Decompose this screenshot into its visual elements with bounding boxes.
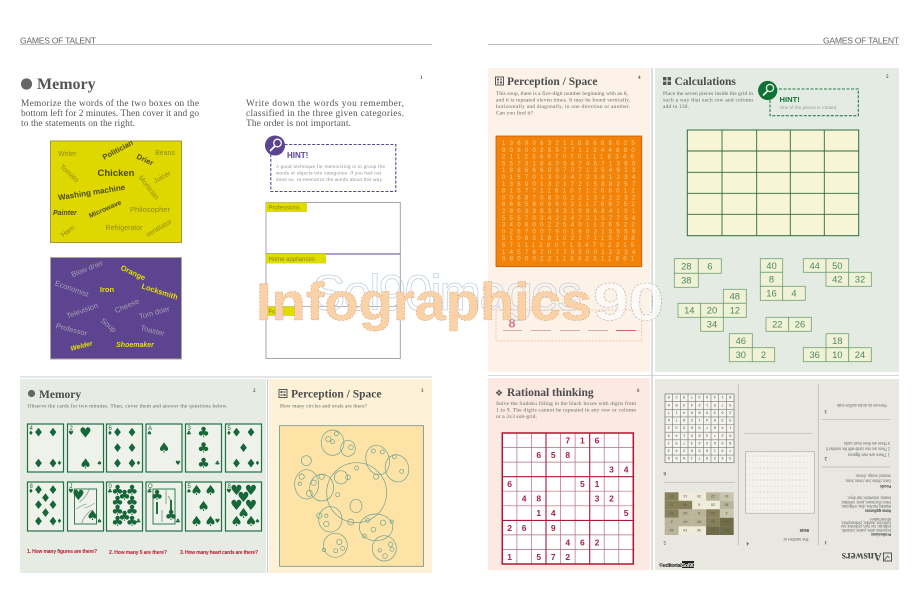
word box: yellow: Chicken	[98, 168, 135, 179]
piece: 46 30 2: 2	[761, 349, 766, 360]
panel: number search	[488, 68, 650, 372]
card: 5 of diamonds: 5	[228, 426, 232, 432]
word box: purple: Cheese	[113, 296, 141, 315]
sudoku grid	[502, 433, 633, 564]
answer 3: There are six circles and five ovals	[837, 403, 887, 408]
instructions	[496, 400, 637, 420]
answer 4 number	[783, 528, 809, 542]
card: ace of spades: A	[148, 426, 152, 432]
word box: yellow: Beans	[155, 150, 175, 157]
piece: 22 26: 26	[795, 318, 805, 330]
heading: Calculations	[674, 76, 736, 88]
sudoku grid: 4832	[522, 494, 614, 504]
panel: answers (upside down)	[655, 379, 899, 570]
piece: 48 14 20 12 34: 14	[684, 304, 695, 316]
answer grid: calculations: 8	[698, 511, 700, 515]
label: Professions	[266, 202, 307, 212]
icon: rational: ❖	[495, 389, 503, 399]
answer number labels: 3	[824, 408, 827, 413]
questions	[27, 549, 258, 556]
card: 3 of clubs: ♣♣♣	[197, 425, 210, 472]
word box: yellow	[50, 138, 182, 242]
icon: calculations	[663, 77, 671, 85]
number grid: 211234970701118346	[502, 155, 638, 161]
answer grid: calculations: 28	[711, 503, 715, 507]
answer 4 number: The number is:	[783, 537, 809, 542]
number grid: 668580660211788752	[502, 202, 639, 208]
card: 2 of hearts: ♥♠	[79, 426, 92, 472]
watermark: Infographics90: 90	[593, 273, 664, 332]
card: 10 of clubs: ♣♣♣♣♣♣♣♣♣♣	[111, 483, 138, 530]
number grid: 340800225401136522	[502, 223, 639, 229]
answer number labels: 2	[824, 455, 827, 460]
answer grid: calculations: 46	[670, 528, 674, 532]
card: 8 of hearts: ♥♥♥♥♥♠♠♠	[230, 483, 257, 530]
answer grid: calculations: 16	[711, 511, 715, 515]
card: ace of spades: ♠♥	[147, 430, 181, 467]
word box: purple: Iron	[100, 285, 114, 294]
answer 1 word lists: collector, welder, philosopher,	[841, 520, 891, 526]
answer grid: sudoku: 342971658	[662, 456, 731, 461]
word box: yellow: ventilator	[145, 218, 174, 239]
hint box: purple: done so, re-memorize the words about this way.	[276, 177, 383, 182]
answer 1 word lists	[840, 474, 891, 537]
number grid: 557318405474571360	[502, 161, 639, 167]
piece: 44 50 42 32: 50	[832, 260, 843, 271]
piece: 40 8 16 4: 4	[791, 288, 797, 298]
answer 1 word lists: mixer, microwave, juicer, ventilator,	[841, 500, 891, 505]
memory instructions: bottom left for 2 minutes. Then cover it and go	[21, 108, 199, 119]
card: 6 of diamonds: 6	[108, 426, 112, 432]
word box: yellow: Painter	[53, 210, 78, 217]
panel: rational thinking	[488, 378, 650, 570]
word box: purple: Orange	[119, 263, 147, 282]
card: 8 of hearts: ♥♠	[226, 488, 260, 525]
word box: yellow: Washing machine	[57, 183, 126, 202]
card: jack of hearts: ♥♠	[72, 488, 99, 524]
page number 2: 2	[253, 389, 256, 394]
card: 4 of diamonds: ♦♦	[28, 430, 62, 467]
instructions	[496, 90, 631, 116]
answer line box: 8	[508, 316, 516, 330]
header: right page: GAMES OF TALENT	[823, 36, 900, 46]
card: 6 of diamonds: ♦♦	[107, 430, 141, 467]
answer 2	[825, 441, 890, 458]
answer grid: calculations: 4	[726, 511, 728, 515]
piece: 22 26	[766, 317, 811, 331]
answer 1 word lists: mustard, orange, cheese.	[855, 474, 891, 478]
hint box: green	[758, 81, 858, 116]
answer grid: calculations: 18	[683, 528, 687, 532]
card: 5 of spades: ♠♥	[186, 488, 220, 525]
piece: 48 14 20 12 34: 34	[707, 318, 717, 330]
heading: Perception / Space	[507, 76, 598, 88]
sudoku grid: 462	[565, 537, 600, 547]
instructions: and it is repeated eleven times. It may be found vertically,	[496, 96, 631, 104]
number grid: 025700790190215556	[502, 229, 639, 235]
piece: 28 6 38: 28	[681, 260, 692, 272]
sudoku grid: 658	[536, 450, 570, 460]
piece: 18 36 10 24: 36	[809, 349, 820, 360]
answer 1 word lists: Foods	[879, 484, 891, 489]
word box: yellow: Juicer	[152, 170, 173, 185]
answer grid: calculations: 36	[697, 528, 701, 532]
answer grid: calculations: 12	[670, 503, 674, 507]
answer 1 word lists: toaster, television, hair dryer.	[847, 496, 891, 500]
card: 4 of diamonds: ♦♦♦♦	[33, 426, 58, 470]
panel: perception circles	[269, 379, 432, 573]
word box: yellow: Politician	[101, 138, 135, 162]
card: 5 of spades: ♠♠♠♠♠	[190, 483, 217, 530]
hint box: green: One of the pieces is rotated.	[780, 105, 838, 110]
questions: 2. How many 5 are there?	[109, 550, 167, 556]
panel: memory cards	[20, 379, 266, 573]
recall instructions	[246, 99, 404, 129]
card: 8 of hearts: 8	[228, 484, 232, 490]
recall instructions: Write down the words you remember,	[246, 99, 404, 109]
panel: memory puzzle 1	[21, 76, 423, 359]
card: 8 of diamonds: 8	[30, 484, 34, 490]
instructions: Solve the Sudoku filling in the black boxes with digits from	[496, 400, 637, 407]
panel: calculations	[655, 68, 899, 372]
card: 2 of hearts: ♥♠	[68, 430, 102, 467]
answer grid: sudoku: 856243791	[662, 441, 731, 446]
card: queen of clubs: ♣♣	[151, 488, 177, 524]
answer dividers	[664, 384, 890, 545]
answer grid: number search	[746, 452, 814, 513]
number grid: 815771161071268012	[502, 189, 639, 195]
sudoku grid: 269	[507, 523, 556, 533]
hint box: purple: A good technique for memorizing is to group the	[276, 164, 385, 169]
instruction: Observe the cards for two minutes. Then, cover them and answer the questions below.	[28, 402, 228, 410]
card: queen of clubs: ♣♣	[147, 488, 181, 525]
piece: 18 36 10 24: 10	[832, 349, 843, 360]
answer grid: calculations: 20	[670, 494, 674, 498]
word box: purple: Welder	[70, 340, 94, 353]
card: 8 of diamonds: ♦♦	[28, 488, 62, 525]
number grid: 555703422472157754	[502, 216, 639, 222]
instructions: add to 130.	[663, 104, 689, 110]
card: 8 of diamonds: ♦♦♦♦♦♦♦♦	[33, 483, 58, 528]
answer grid: sudoku	[662, 394, 734, 463]
piece: 46 30 2: 30	[736, 349, 746, 360]
piece: 40 8 16 4: 8	[769, 274, 774, 284]
word box: yellow: Tomato	[58, 164, 80, 184]
card: jack of hearts: J	[70, 484, 72, 490]
answer grid: sudoku: 791658243	[662, 448, 731, 453]
card: 6 of diamonds: ♦♦♦♦♦♦	[112, 426, 137, 470]
instructions: such a way that each row and column	[663, 98, 753, 104]
question: How many circles and ovals are there?	[280, 404, 368, 410]
answer grid: calculations: 38	[725, 503, 729, 507]
number grid: 908002557711244880	[502, 148, 639, 154]
answer 2: 3 There are three heart cards	[844, 441, 890, 446]
word box: yellow: Microwave	[88, 199, 123, 220]
word box: purple: Professor	[55, 321, 89, 338]
icon: magnifying glass	[758, 81, 777, 100]
card: 3 of clubs: ♣♣	[186, 430, 220, 467]
answer grid: calculations	[665, 492, 734, 535]
answer grid: calculations: 14	[683, 494, 687, 498]
piece: 40 8 16 4	[760, 259, 805, 300]
heading: Memory: Memory	[37, 76, 96, 93]
piece: 28 6 38	[674, 259, 721, 287]
word box: purple	[50, 258, 182, 359]
card: ace of spades: ♠	[158, 440, 170, 456]
answer grid: sudoku: 935412876	[662, 418, 731, 423]
answer grid: calculations: 10	[711, 528, 715, 532]
piece: 18 36 10 24	[803, 334, 871, 362]
piece: 40 8 16 4: 16	[766, 288, 777, 298]
answer 1 word lists: Home appliances	[865, 508, 891, 514]
memory instructions: to the statements on the right.	[21, 119, 135, 129]
sudoku grid: 1572	[507, 552, 570, 562]
heading: Answers: Answers	[841, 550, 882, 562]
memory instructions: Memorize the words of the two boxes on the	[21, 98, 199, 109]
watermark: outline text: Sol90images	[312, 265, 582, 321]
card: 5 of diamonds: ♦♦	[226, 430, 260, 467]
answer grid: sudoku: 148796532	[662, 426, 731, 431]
sudoku grid: 145	[536, 508, 629, 518]
answer number labels: 6	[663, 470, 666, 475]
piece: 40 8 16 4: 40	[766, 260, 777, 271]
answer grid: sudoku: 814637925	[662, 395, 731, 400]
card: 10 of clubs: ♣♣	[107, 488, 141, 525]
answer grid: calculations: 2	[671, 520, 673, 524]
answer grid: calculations: 32	[725, 520, 729, 524]
piece: 44 50 42 32: 32	[855, 274, 865, 284]
word box: purple: Blow drier	[70, 258, 105, 279]
answer box with three categories	[266, 202, 400, 358]
answer grid: sudoku: 579124386	[662, 403, 731, 408]
piece: 48 14 20 12 34	[678, 289, 746, 331]
memory instructions	[21, 98, 199, 129]
answer grid: calculations: 48	[683, 503, 687, 507]
card: queen of clubs: Q	[148, 484, 153, 490]
sudoku grid: 34	[609, 464, 629, 474]
instructions: or a 3x3 sub-grid.	[496, 414, 537, 420]
empty 5x5 grid	[687, 130, 859, 236]
piece: 48 14 20 12 34: 12	[730, 304, 740, 316]
answer grid: calculations: 34	[725, 494, 729, 498]
instructions: Place the seven pieces inside the grid in	[663, 91, 753, 97]
card: jack of hearts: ♥♠	[68, 488, 102, 525]
page number 5: 5	[886, 75, 889, 80]
number grid: 280338343108684101	[502, 209, 639, 215]
header: left page: GAMES OF TALENT	[20, 36, 97, 46]
answer 1 word lists: Professions	[870, 532, 891, 537]
answer grid: calculations: 42	[711, 520, 715, 524]
instructions: Can you find it?	[496, 110, 534, 116]
number grid: 136906321188688025	[502, 141, 639, 147]
number grid: 188666007071254613	[502, 168, 639, 174]
piece: 28 6 38: 6	[707, 260, 712, 272]
recall instructions: classified in the three given categories.	[246, 108, 404, 119]
card: 4 of diamonds: 4	[30, 426, 34, 432]
piece: 18 36 10 24: 24	[855, 349, 865, 360]
piece: 44 50 42 32	[803, 259, 871, 286]
sudoku grid: 651	[507, 479, 600, 489]
answer grid: calculations: 30	[670, 511, 674, 515]
answer number labels	[663, 408, 827, 545]
word box: yellow: Philosopher	[130, 205, 171, 214]
answer number labels: 1	[824, 539, 827, 544]
page number 1: 1	[420, 76, 423, 81]
label: Food	[266, 306, 302, 316]
answer grid: sudoku: 263589417	[662, 410, 731, 415]
watermark: Infographics90: Infographics	[256, 273, 592, 332]
answer grid: calculations: 26	[697, 494, 701, 498]
answer grid: calculations: 6	[698, 503, 700, 507]
answer 1 word lists: shoemaker.	[869, 517, 891, 522]
word box: yellow: Writer	[58, 151, 77, 158]
instructions: This soup, there is a five-digit number beginning with an 8,	[496, 90, 629, 97]
questions: 3. How many heart cards are there?	[180, 550, 258, 556]
number grid: 145767077850012234	[502, 250, 639, 256]
card: 5 of diamonds: ♦♦♦♦♦	[231, 426, 256, 470]
word box: yellow: Refrigerator	[106, 225, 143, 232]
word box: purple: Shoemaker	[116, 342, 155, 349]
page number 4: 4	[638, 76, 641, 81]
answer grid: calculations: 40	[683, 511, 687, 515]
number grid	[496, 136, 642, 267]
instructions: horizontally and diagonally, in one direction or another.	[496, 104, 630, 110]
word box: purple: Locksmith	[141, 282, 179, 302]
hint box: purple	[265, 136, 396, 192]
word box: yellow: Ham	[60, 225, 76, 239]
label: Home appliances	[266, 254, 326, 264]
answer 1 word lists: Washing machine, drier, refrigerator,	[841, 504, 891, 509]
sudoku grid: 716	[565, 435, 600, 445]
answer grid: calculations: 22	[711, 494, 715, 498]
answer 1 word lists: politician, tax man, professor, tax	[840, 524, 891, 529]
heading: Perception / Space	[291, 388, 382, 400]
hint box: purple: HINT!	[287, 151, 308, 160]
piece: 28 6 38: 38	[681, 274, 692, 286]
answer 1 word lists: Carrot, chicken, ham, tomato, beans,	[845, 478, 891, 484]
word box: purple: Television	[65, 301, 99, 321]
answer number labels: 4	[746, 540, 749, 545]
piece: 22 26: 22	[772, 318, 783, 330]
label: Home appliances: Home appliances	[268, 257, 315, 263]
number grid: 015701302472361234	[502, 175, 639, 181]
word box: purple: Soup	[99, 316, 118, 334]
answer grid: calculations: 24	[725, 528, 729, 532]
number grid: 510801810217115708	[502, 236, 639, 242]
answer number labels: 5	[663, 539, 666, 544]
heading: Memory: Memory	[39, 389, 81, 401]
icon: perception	[496, 77, 504, 85]
answer 2: 2 There are two cards with the number 5	[825, 446, 890, 452]
questions: 1. How many figures are there?	[27, 549, 97, 555]
number grid: 571112807134702315	[502, 243, 639, 249]
hint box: purple: words or objects into categories. If you had not	[276, 170, 382, 176]
instructions	[663, 91, 753, 110]
piece: 18 36 10 24: 18	[832, 335, 843, 346]
instructions: 1 to 9. The digits cannot be repeated in any row or column	[496, 408, 636, 414]
piece: 48 14 20 12 34: 48	[730, 290, 740, 302]
icon: perception	[279, 390, 287, 398]
answer grid: calculations: 50	[697, 520, 701, 524]
chart: circles and ovals	[280, 426, 424, 566]
piece: 48 14 20 12 34: 20	[707, 304, 717, 316]
page number 3: 3	[421, 389, 424, 394]
answer grid: sudoku: 627385149	[662, 433, 731, 438]
word box: purple: Tom drier	[138, 304, 171, 321]
page number 6: 6	[637, 389, 640, 394]
word box: purple: Economist	[54, 278, 91, 299]
answer 2: 1 There are two figures	[848, 452, 890, 458]
answer 4 number: 8645	[799, 528, 809, 533]
word box: purple: Toaster	[140, 323, 166, 338]
logo: editorial Sol90: ©editorialSol90	[659, 562, 695, 569]
answer line box	[496, 310, 642, 341]
piece: 46 30 2: 46	[736, 335, 746, 346]
number grid: 080002211342311861	[502, 257, 639, 263]
label: Food: Food	[268, 310, 282, 316]
piece: 44 50 42 32: 44	[809, 260, 820, 271]
answer 1 word lists: Economist, writer, painter, locksmith,	[841, 528, 891, 533]
label: Professions: Professions	[268, 206, 300, 212]
card: 10 of clubs: 0	[108, 484, 112, 490]
heading: Rational thinking	[507, 387, 594, 399]
answer grid: calculations: 44	[683, 520, 687, 524]
word box: yellow: Drier	[135, 152, 155, 168]
card: 2 of hearts: 2	[70, 426, 74, 432]
icon: magnifying glass	[265, 136, 285, 156]
recall instructions: The order is not important.	[246, 119, 351, 129]
card: 5 of spades: 5	[188, 484, 192, 490]
piece: 46 30 2	[729, 334, 775, 362]
word box: yellow: Mortician	[137, 175, 160, 202]
number grid: 136901321721588257	[502, 182, 639, 188]
number grid: 006870800221342232	[502, 195, 639, 201]
card: 3 of clubs: 3	[188, 426, 192, 432]
hint box: green: HINT!	[780, 95, 800, 104]
piece: 44 50 42 32: 42	[832, 274, 843, 284]
